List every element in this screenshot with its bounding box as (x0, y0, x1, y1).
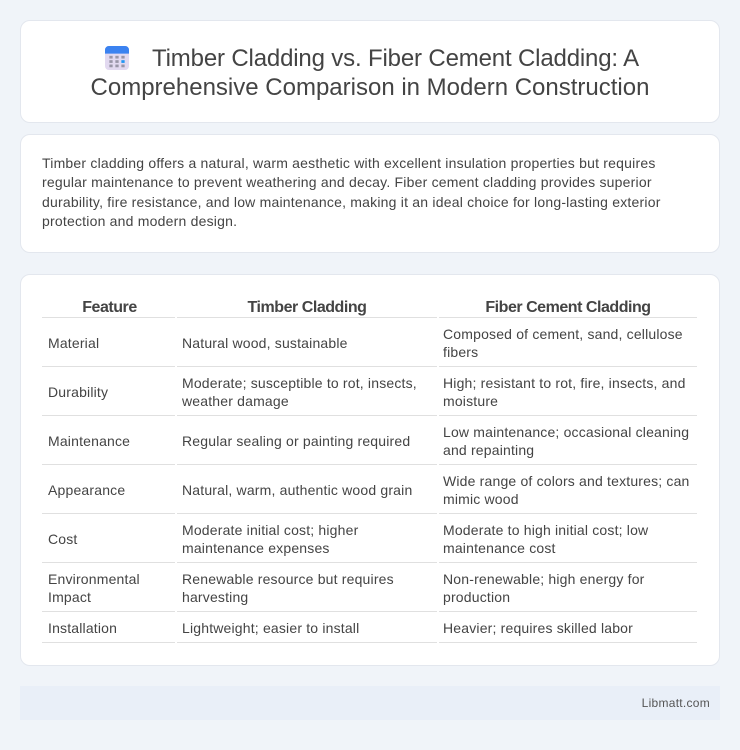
intro card (20, 134, 720, 253)
row: appearance: Appearance (48, 482, 125, 498)
comparison table: Natural, warm, authentic wood grain (182, 482, 412, 498)
footer text: Libmatt.com (642, 696, 710, 710)
row: material: Material (48, 335, 99, 351)
comparison table: moisture (443, 393, 498, 409)
row: durability: Durability (48, 384, 108, 400)
row: maintenance: Maintenance (48, 433, 130, 449)
title: Comprehensive Comparison in Modern Construction (91, 74, 649, 101)
comparison table: Natural wood, sustainable (182, 335, 348, 351)
header: feature: Feature (82, 299, 137, 316)
comparison table: Moderate; susceptible to rot, insects, (182, 375, 417, 391)
title: Timber Cladding vs. Fiber Cement Cladding: A (152, 45, 639, 72)
comparison table: mimic wood (443, 491, 519, 507)
comparison table: Composed of cement, sand, cellulose (443, 326, 683, 342)
header card (20, 20, 720, 123)
comparison table: Wide range of colors and textures; can (443, 473, 690, 489)
intro text (42, 155, 661, 229)
comparison table: maintenance cost (443, 540, 556, 556)
row: environmental impact (48, 571, 140, 605)
comparison table: Renewable resource but requires (182, 571, 394, 587)
comparison table: fibers (443, 344, 478, 360)
intro text: protection and modern design. (42, 213, 237, 229)
footer (20, 686, 720, 720)
header: timber cladding: Timber Cladding (248, 299, 366, 316)
icon: calendar (105, 46, 129, 70)
row: installation: Installation (48, 620, 117, 636)
comparison table: weather damage (182, 393, 289, 409)
comparison table: harvesting (182, 589, 248, 605)
comparison table: Moderate to high initial cost; low (443, 522, 648, 538)
intro text: durability, fire resistance, and low maintenance, making it an ideal choice for long-lasting exterior (42, 194, 661, 210)
comparison table: Regular sealing or painting required (182, 433, 410, 449)
comparison table: Heavier; requires skilled labor (443, 620, 633, 636)
intro text: Timber cladding offers a natural, warm aesthetic with excellent insulation properties but requires (42, 155, 656, 171)
header: fiber cement cladding: Fiber Cement Cladding (485, 299, 651, 316)
comparison table: Moderate initial cost; higher (182, 522, 358, 538)
comparison table: Low maintenance; occasional cleaning (443, 424, 689, 440)
comparison table: Lightweight; easier to install (182, 620, 359, 636)
comparison table (42, 299, 697, 643)
comparison table: and repainting (443, 442, 534, 458)
comparison table: Non-renewable; high energy for (443, 571, 645, 587)
table card (20, 274, 720, 666)
row: cost: Cost (48, 531, 78, 547)
comparison table: High; resistant to rot, fire, insects, and (443, 375, 686, 391)
row: environmental impact: Impact (48, 589, 91, 605)
intro text: regular maintenance to prevent weathering and decay. Fiber cement cladding provides superior (42, 174, 652, 190)
comparison table: production (443, 589, 510, 605)
comparison table: maintenance expenses (182, 540, 330, 556)
title (91, 45, 649, 101)
row: environmental impact: Environmental (48, 571, 140, 587)
